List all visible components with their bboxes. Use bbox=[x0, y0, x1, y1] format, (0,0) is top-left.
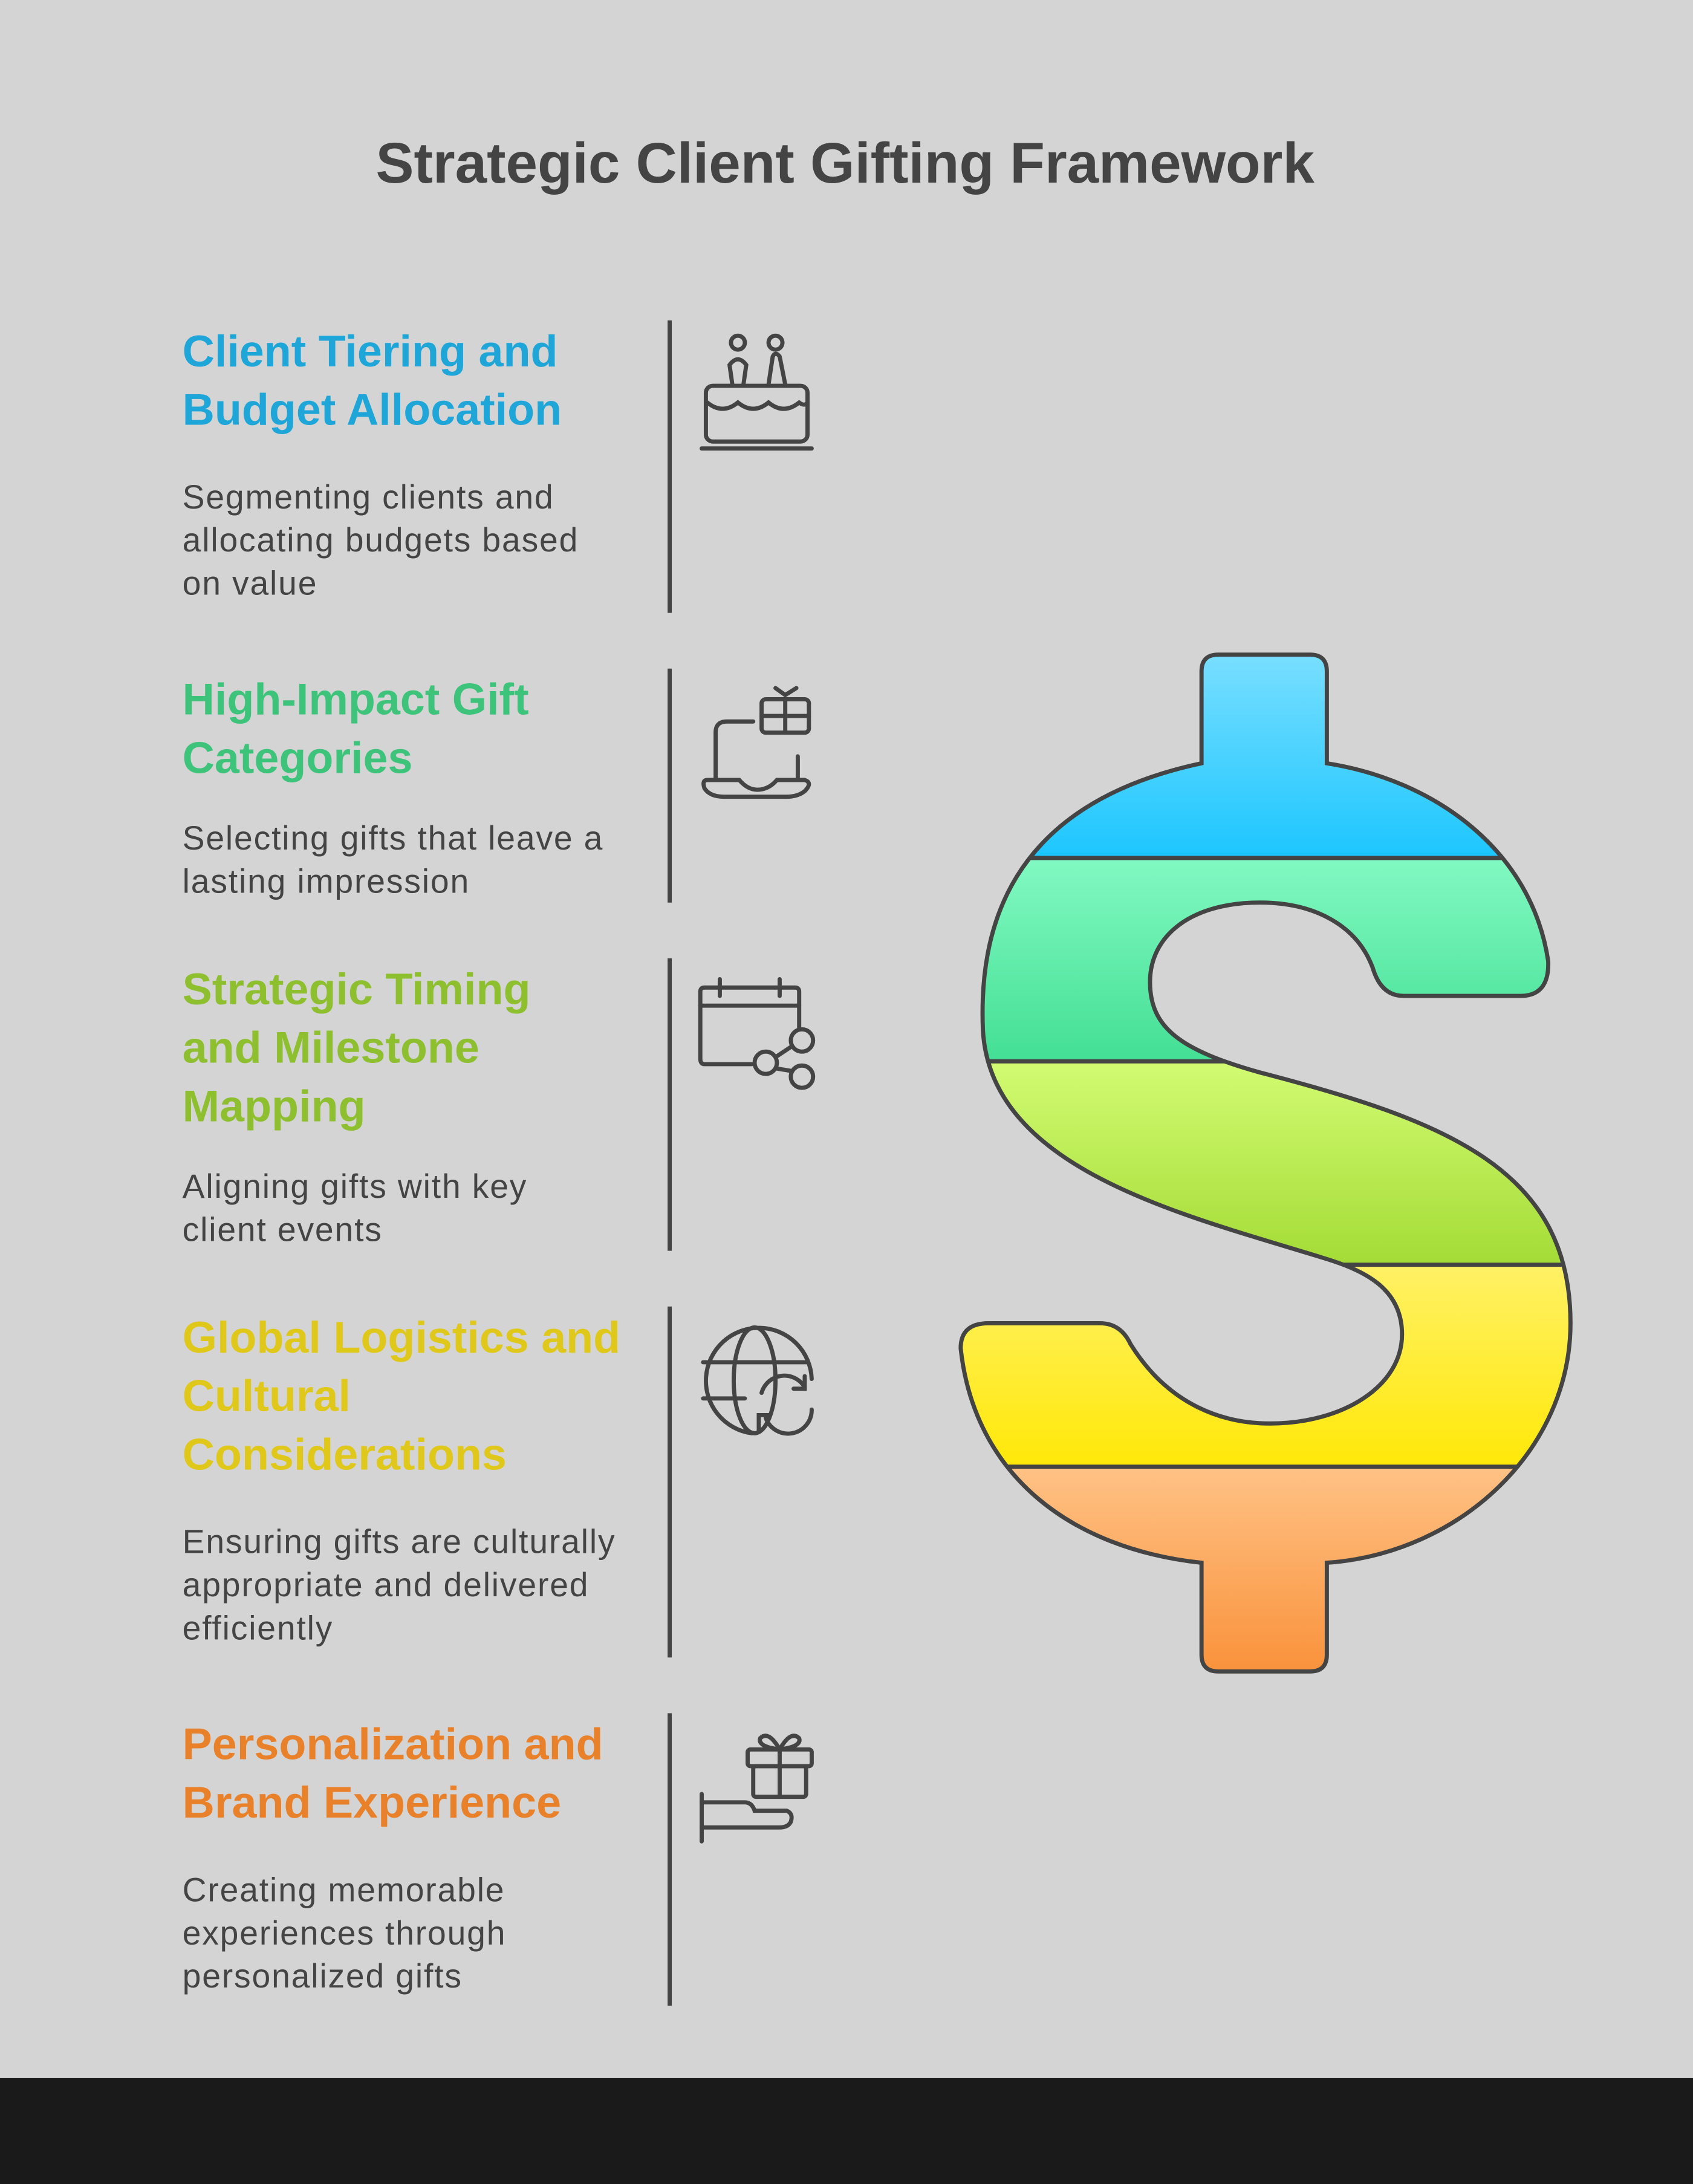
section: strategic timing: client events bbox=[183, 1211, 383, 1248]
title: Strategic Client Gifting Framework bbox=[375, 132, 1314, 195]
section: strategic timing bbox=[183, 958, 670, 1251]
section: global logistics: Global Logistics and bbox=[183, 1312, 620, 1362]
section: personalization: experiences through bbox=[183, 1914, 506, 1952]
section: personalization: Brand Experience bbox=[183, 1777, 561, 1827]
section: high-impact gifts: Selecting gifts that leave a bbox=[183, 819, 603, 857]
section: strategic timing: Strategic Timing bbox=[183, 964, 531, 1014]
section: personalization: Creating memorable bbox=[183, 1871, 505, 1908]
section: strategic timing: and Milestone bbox=[183, 1022, 479, 1073]
icon: globe refresh bbox=[703, 1327, 811, 1434]
section: client tiering: Segmenting clients and bbox=[183, 478, 554, 516]
section: global logistics: efficiently bbox=[183, 1609, 333, 1646]
section: strategic timing: Mapping bbox=[183, 1081, 365, 1131]
section: high-impact gifts bbox=[183, 669, 670, 903]
icon: cake bbox=[702, 336, 811, 449]
section: high-impact gifts: lasting impression bbox=[183, 863, 470, 900]
section: global logistics: Considerations bbox=[183, 1429, 507, 1479]
icon: laptop gift bbox=[704, 688, 809, 797]
section: client tiering: Client Tiering and bbox=[183, 326, 557, 376]
section: global logistics: appropriate and delivered bbox=[183, 1566, 589, 1604]
section: client tiering: allocating budgets based bbox=[183, 521, 579, 559]
icon: calendar share bbox=[700, 979, 813, 1088]
section: client tiering: on value bbox=[183, 565, 317, 602]
section: client tiering bbox=[183, 320, 670, 613]
section: high-impact gifts: High-Impact Gift bbox=[183, 674, 529, 724]
section: global logistics bbox=[183, 1307, 670, 1657]
section: strategic timing: Aligning gifts with key bbox=[183, 1168, 527, 1205]
section: personalization bbox=[183, 1713, 670, 2006]
section: personalization: Personalization and bbox=[183, 1718, 603, 1769]
dollar sign chart bbox=[947, 641, 1587, 1675]
section: global logistics: Cultural bbox=[183, 1371, 351, 1421]
section: client tiering: Budget Allocation bbox=[183, 385, 562, 435]
section: personalization: personalized gifts bbox=[183, 1957, 463, 1995]
icon: hand gift bbox=[702, 1736, 811, 1841]
section: high-impact gifts: Categories bbox=[183, 732, 412, 782]
section: global logistics: Ensuring gifts are culturally bbox=[183, 1523, 616, 1560]
